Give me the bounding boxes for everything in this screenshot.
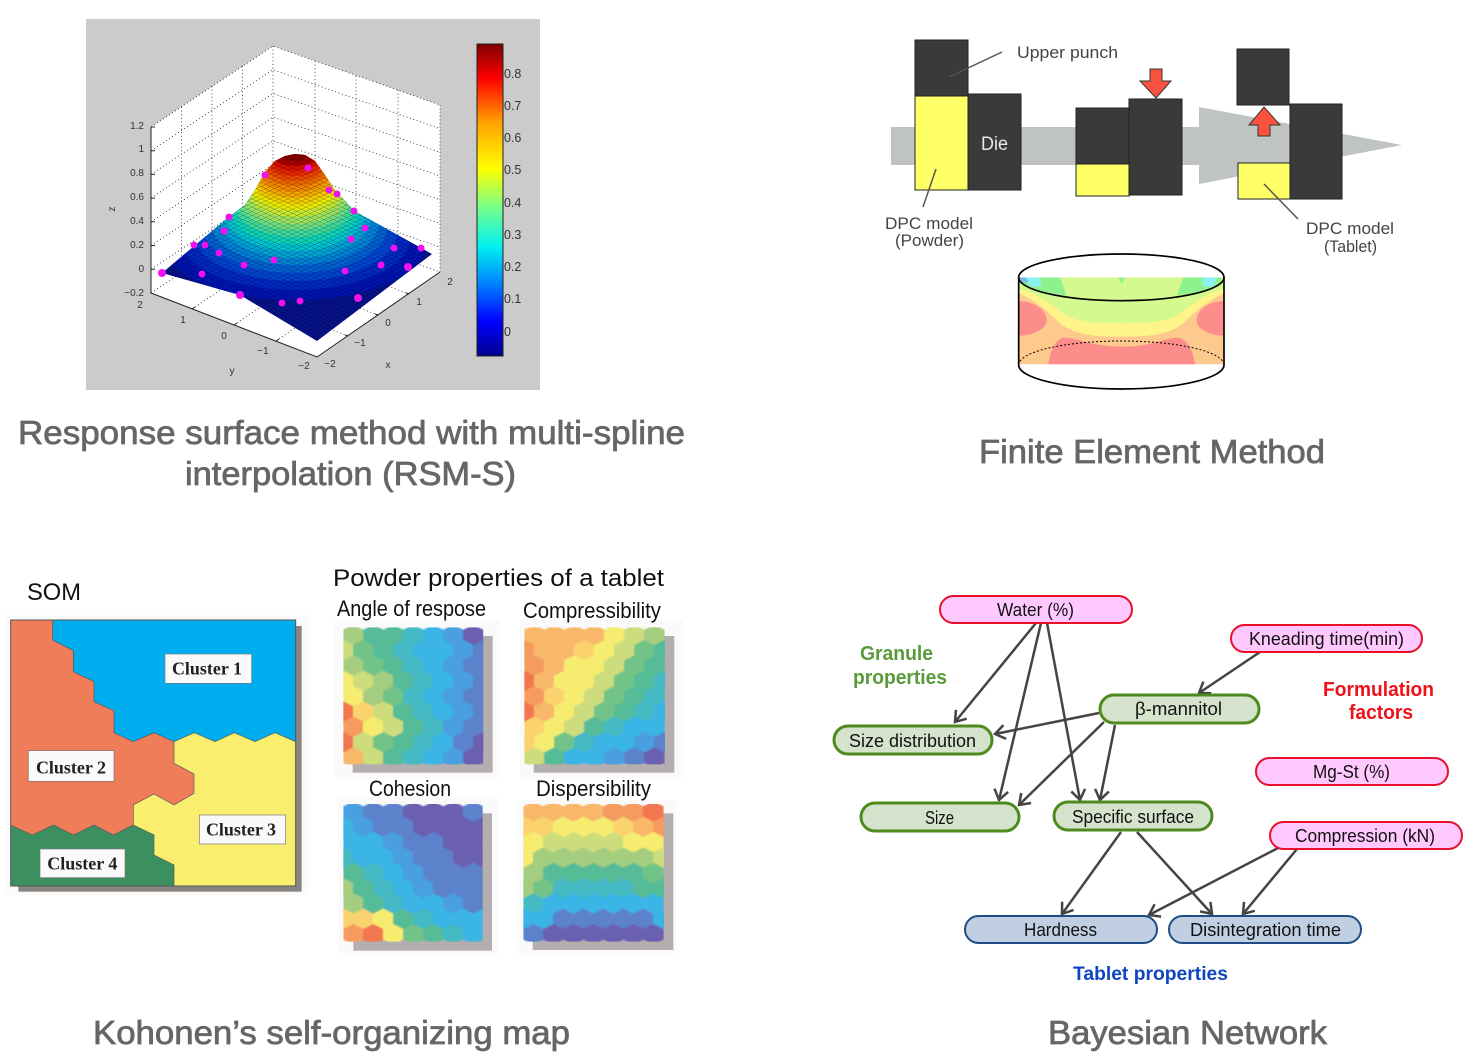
map labels: Dispersibility <box>536 776 651 801</box>
axis tick labels: 1 <box>180 315 186 326</box>
map: dispersibility <box>523 804 674 950</box>
panel: powder property maps <box>333 565 683 953</box>
colorbar: 0.8 <box>504 67 521 81</box>
panel: finite element method <box>885 40 1402 389</box>
axis tick labels: 0 <box>221 331 227 342</box>
colorbar: 0.3 <box>504 228 521 242</box>
surface mesh <box>165 154 431 341</box>
node: Specific surface <box>1054 802 1212 830</box>
axis tick labels: 1.2 <box>130 121 144 132</box>
title: Kohonen map: Kohonen’s self-organizing map <box>93 1014 570 1051</box>
colorbar: 0.7 <box>504 99 521 113</box>
leader lines <box>923 52 1298 219</box>
axis tick labels: 0 <box>138 264 144 275</box>
title: RSM-S <box>18 414 685 492</box>
node: Compression <box>1270 822 1462 849</box>
axis tick labels: 1 <box>416 297 422 308</box>
axis tick labels: 0.6 <box>130 192 144 203</box>
label: formulation factors <box>1323 679 1434 724</box>
axis tick labels: y <box>230 366 234 377</box>
map labels: Compressibility <box>523 598 661 623</box>
labels: DPC model <box>1306 219 1394 238</box>
axis tick labels: 2 <box>447 277 453 288</box>
node: Water: Water (%) <box>997 600 1074 620</box>
node: Kneading time <box>1231 625 1422 652</box>
axis tick labels <box>107 121 453 377</box>
label: formulation factors: factors <box>1349 702 1413 724</box>
stage 2: compression <box>1076 99 1182 196</box>
axis tick labels: 0.4 <box>130 216 144 227</box>
tablet cross-section with stress contours <box>1019 254 1224 389</box>
plot background <box>86 19 540 390</box>
axis tick labels: 1 <box>138 144 144 155</box>
stage 1: powder fill <box>915 40 1021 190</box>
axis tick labels: 0.2 <box>130 240 144 251</box>
axis tick labels: z <box>107 206 118 212</box>
colorbar <box>477 44 521 356</box>
hex maps <box>333 620 683 953</box>
cluster labels: Cluster 2 <box>36 757 106 777</box>
axis tick labels: −2 <box>324 359 336 370</box>
cluster labels <box>28 654 286 878</box>
label: formulation factors: Formulation <box>1323 679 1434 701</box>
labels: Die <box>981 134 1008 155</box>
axis tick labels: −0.2 <box>124 288 144 299</box>
colorbar: 0.6 <box>504 131 521 145</box>
map labels: Angle of respose <box>337 596 486 621</box>
axis tick labels: −1 <box>257 346 269 357</box>
SOM label: SOM <box>27 579 81 606</box>
label: granule properties: Granule <box>860 643 933 665</box>
panel: response surface method <box>86 19 540 390</box>
colorbar: 0.2 <box>504 260 521 274</box>
title: RSM-S: interpolation (RSM-S) <box>185 455 516 492</box>
labels: (Tablet) <box>1324 237 1377 256</box>
node: Hardness: Hardness <box>1024 920 1097 940</box>
label: tablet properties: Tablet properties <box>1073 964 1228 985</box>
labels: (Powder) <box>895 231 964 250</box>
node: Disintegration time: Disintegration time <box>1190 920 1341 940</box>
labels: Upper punch <box>1017 43 1118 62</box>
axis tick labels: x <box>386 360 390 371</box>
colorbar: 0.1 <box>504 292 521 306</box>
labels <box>885 43 1394 256</box>
node: Size: Size <box>925 808 954 828</box>
big process arrow <box>891 107 1402 184</box>
sample points <box>158 164 424 306</box>
labels: DPC model <box>885 214 973 233</box>
edges <box>955 623 1297 915</box>
title: finite element method: Finite Element Method <box>979 433 1325 470</box>
node: Size distribution: Size distribution <box>849 731 976 751</box>
map labels <box>337 596 661 801</box>
node: Compression: Compression (kN) <box>1295 826 1435 846</box>
panel: Bayesian network <box>834 596 1462 985</box>
map labels: Cohesion <box>369 776 451 801</box>
node: Water <box>940 596 1132 623</box>
panel: SOM cluster map <box>5 579 308 895</box>
axis tick labels: 0 <box>385 318 391 329</box>
node: beta-mannitol <box>1100 695 1259 723</box>
node: Size distribution <box>834 726 992 754</box>
node: Disintegration time <box>1169 916 1361 943</box>
colorbar: 0.4 <box>504 196 521 210</box>
axis tick labels: 2 <box>137 300 143 311</box>
arrow: release up <box>1249 107 1280 136</box>
node: Mg-St <box>1256 758 1448 785</box>
title: Bayesian network: Bayesian Network <box>1048 1014 1328 1051</box>
colorbar: 0 <box>504 325 511 339</box>
title: RSM-S: Response surface method with multi-spline <box>18 414 685 451</box>
node: beta-mannitol: β-mannitol <box>1135 699 1222 719</box>
stage 3: tablet ejection <box>1237 49 1342 199</box>
node: Size <box>861 803 1019 831</box>
axis tick labels: 0.8 <box>130 168 144 179</box>
node: Specific surface: Specific surface <box>1072 807 1194 827</box>
label: granule properties <box>853 643 947 689</box>
heading: Powder properties of a tablet <box>333 565 664 592</box>
map: cohesion <box>343 804 492 951</box>
arrow: press down <box>1140 69 1171 98</box>
colorbar: 0.5 <box>504 163 521 177</box>
cluster map <box>5 615 308 895</box>
node: Hardness <box>965 916 1157 943</box>
map: compressibility <box>524 627 674 773</box>
node: Kneading time: Kneading time(min) <box>1249 629 1404 649</box>
3D axes and grid <box>151 46 440 357</box>
cluster labels: Cluster 4 <box>47 854 117 874</box>
map: angle of repose <box>343 627 493 773</box>
cluster labels: Cluster 1 <box>172 659 242 679</box>
surface: bell on blue plate <box>165 154 432 341</box>
cluster labels: Cluster 3 <box>206 820 276 840</box>
axis tick labels: −2 <box>298 361 310 372</box>
label: granule properties: properties <box>853 667 947 689</box>
node: Mg-St: Mg-St (%) <box>1313 762 1390 782</box>
axis tick labels: −1 <box>354 338 366 349</box>
